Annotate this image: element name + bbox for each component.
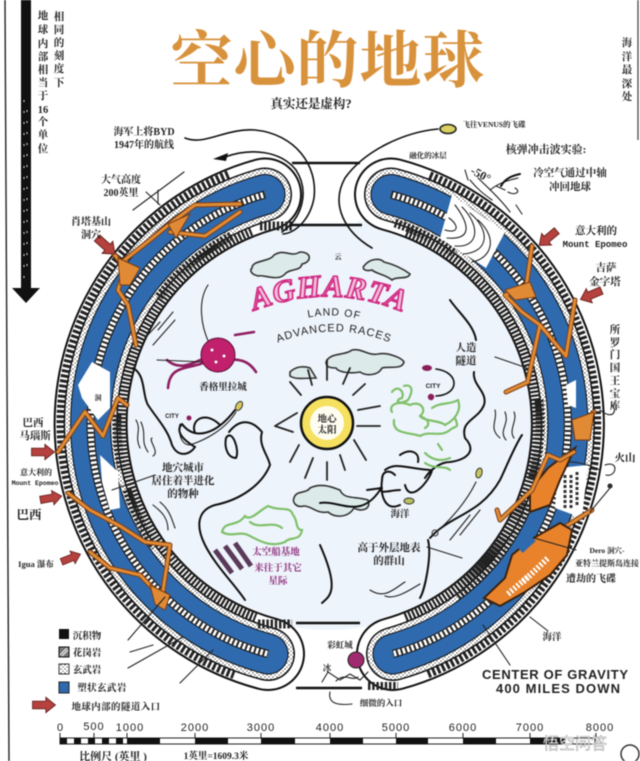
vertical note: depth scale: 部 (38, 50, 49, 63)
labels: upper left: 海军上将BYD (113, 125, 175, 138)
inner granite hatch bands (117, 223, 540, 686)
earth crust left half (91, 194, 268, 654)
water squiggles (136, 312, 515, 597)
distance scale: 3000 (247, 722, 275, 734)
sun label: 太阳 (317, 424, 337, 436)
labels: upper left: 200英里 (104, 186, 138, 199)
inner continent outlines (133, 300, 522, 603)
watermark (543, 735, 639, 761)
tunnels and orange deposits: lower right (484, 448, 592, 606)
atmosphere height marker (133, 172, 184, 210)
shuttle line: BYD route (185, 130, 314, 234)
label: spaceship base (252, 546, 302, 587)
legend: 花岗岩 (73, 647, 102, 659)
vertical note: depth scale: 地 (38, 9, 49, 22)
label: spaceship base: 来往于其它 (254, 562, 302, 574)
labels: right side: 遭劫的飞碟 (566, 572, 616, 585)
labels: left side: 意大利的 (20, 467, 52, 477)
distance scale: 8000 (586, 722, 614, 734)
caves in the crust (78, 362, 588, 518)
label: spaceship base: 星际 (268, 575, 288, 587)
vertical note: deepest ocean: 深 (622, 78, 633, 90)
distance scale: 500 (83, 721, 105, 733)
vertical note: deepest ocean: 处 (622, 90, 633, 103)
labels: bottom center: 海洋 (542, 631, 562, 643)
label: spaceship base: 太空船基地 (252, 546, 300, 558)
vertical note: depth scale: 同 (54, 24, 64, 36)
cities and saucers inside (179, 365, 483, 536)
vertical note: deepest ocean: 最 (622, 63, 633, 76)
legend: 玄武岩 (73, 664, 102, 676)
tunnels: left side (58, 398, 170, 610)
labels: right side (358, 341, 640, 585)
labels: upper left: 洞穴 (81, 228, 101, 241)
distance scale: 2000 (181, 722, 209, 734)
labels: upper right: 飞往VENUS的飞碟 (463, 119, 526, 129)
distance scale: 0 (57, 722, 63, 734)
labels: upper right: 冷空气通过中轴 (533, 166, 607, 179)
labels: left side (12, 416, 59, 569)
sun label (317, 413, 338, 436)
label: Solomon's treasury: 国 (610, 361, 621, 374)
vertical note: depth scale: 的 (54, 36, 65, 49)
labels: upper right: 意大利的 (575, 224, 617, 237)
label: Solomon's treasury: 所 (610, 323, 621, 336)
vertical note: depth scale: 位 (38, 142, 49, 155)
labels: right side: 高于外层地表 (358, 541, 421, 554)
labels: upper right (409, 119, 627, 288)
space base bars (215, 543, 251, 573)
labels: interior left: CITY (426, 383, 441, 390)
labels: left side: Igua 瀑布 (18, 559, 54, 569)
labels: bottom center: 彩虹城 (327, 640, 353, 650)
labels: interior left: 香格里拉城 (199, 381, 247, 393)
leader lines (112, 357, 615, 683)
labels: upper left: 1947年的航线 (114, 138, 174, 151)
labels: upper right: 吉萨 (596, 261, 617, 274)
vertical note: depth scale: 当 (38, 76, 48, 89)
subtitle: 真实还是虚构? (270, 96, 352, 111)
bottom center details: rainbow city and ice (322, 652, 368, 682)
distance scale: 1000 (116, 722, 144, 734)
labels: right side: 海洋 (390, 508, 410, 520)
vertical note: deepest ocean: 海 (622, 36, 633, 49)
label: Solomon's treasury: 门 (610, 348, 620, 361)
labels: interior left: 洞 (94, 394, 102, 402)
labels: right side: 火山 (614, 451, 636, 464)
vertical note: depth scale: 16 (38, 105, 48, 116)
labels: left side: 马瑙斯 (19, 429, 51, 442)
title: 空心的地球 (170, 27, 486, 96)
labels: right side: Dero 洞穴- (589, 545, 625, 555)
label: Solomon's treasury: 宝 (610, 387, 621, 400)
labels: interior left: CITY (165, 414, 179, 420)
vertical note: depth scale: 内 (38, 37, 48, 50)
labels: bottom center: 细微的入口 (360, 698, 402, 708)
labels: right side: 人造 (456, 341, 477, 354)
center of gravity label: 400 MILES DOWN (496, 681, 620, 696)
sun label: 地心 (317, 413, 338, 425)
labels: interior left: 的物种 (167, 487, 199, 500)
labels: left side: 巴西 (16, 507, 42, 522)
label: Solomon's treasury (610, 323, 621, 412)
red arrows: tunnel entrances (32, 225, 604, 568)
labels: bottom center: 冰 (323, 663, 332, 673)
labels: upper right: 金字塔 (589, 275, 621, 288)
label: Solomon's treasury: 罗 (610, 336, 620, 349)
land of: LAND OF (307, 307, 361, 319)
tunnels: upper left (114, 204, 240, 345)
legend: 地球内部的隧道入口 (71, 701, 161, 713)
labels: interior left: 云 (334, 252, 342, 261)
vertical note: depth scale (38, 9, 65, 155)
center of gravity label (482, 667, 628, 696)
labels: right side: 亚特兰提斯岛连接 (575, 558, 640, 568)
distance scale: 5000 (382, 722, 410, 734)
labels: upper right: 融化的冰层 (409, 150, 447, 160)
vertical note: depth scale: 于 (38, 90, 49, 102)
labels: upper right: 冲回地球 (549, 180, 591, 193)
labels: right side: 隧道 (456, 354, 477, 367)
center of gravity label: CENTER OF GRAVITY (482, 667, 628, 682)
AGHARTA title (251, 274, 406, 344)
green forests (222, 386, 459, 544)
hollow interior (122, 163, 534, 688)
shock wave break in crust (440, 170, 522, 268)
vertical note: depth scale: 球 (38, 23, 49, 36)
vertical note: depth scale: 相 (54, 10, 65, 23)
legend (33, 629, 161, 713)
distance scale: 4000 (316, 722, 344, 734)
labels: upper left: 肖塔基山 (71, 215, 111, 228)
vertical note: deepest ocean: 洋 (622, 50, 633, 63)
vertical note: depth scale: 下 (54, 76, 65, 89)
labels: bottom center (323, 631, 562, 708)
labels: interior left (94, 252, 441, 500)
labels: upper left: 大气高度 (101, 173, 141, 186)
distance scale: 6000 (449, 722, 477, 734)
labels: right side: 的群山 (373, 554, 405, 567)
vertical note: depth scale: 相 (38, 63, 49, 76)
vertical note: depth scale: 个 (38, 115, 49, 128)
labels: interior left: 居住着半进化 (152, 474, 215, 487)
distance scale (57, 721, 614, 761)
advanced races: ADVANCED RACES (277, 323, 392, 344)
labels: upper right: Mount Epomeo (563, 240, 627, 250)
flight path to Venus (339, 124, 456, 248)
vertical note: deepest ocean (622, 36, 633, 103)
legend: 沉积物 (73, 630, 102, 642)
labels: upper left (71, 125, 175, 241)
labels: upper right: 核弹冲击波实验: (506, 142, 586, 156)
tunnels: upper right (505, 246, 594, 440)
watermark: 悟空问答 (543, 735, 607, 753)
clouds (251, 252, 410, 516)
labels: interior left: 地穴城市 (162, 461, 204, 474)
Shangri-La city (157, 285, 256, 388)
vertical note: depth scale: 单 (38, 128, 49, 141)
labels: left side: 巴西 (22, 416, 44, 429)
labels: left side: Mount Epomeo (12, 480, 59, 487)
earth crust right half (391, 194, 568, 654)
vertical note: depth scale: 度 (54, 62, 65, 75)
sun (275, 360, 380, 480)
AGHARTA title: AGHARTA (251, 274, 406, 313)
shock wave angle mark: -50° (468, 163, 494, 186)
label: Solomon's treasury: 库 (610, 399, 621, 412)
depth scale arrow (12, 0, 40, 303)
label: Solomon's treasury: 王 (610, 374, 621, 387)
legend: 塑状玄武岩 (77, 682, 127, 694)
vertical note: depth scale: 刻 (54, 49, 65, 62)
distance scale: 7000 (516, 722, 544, 734)
